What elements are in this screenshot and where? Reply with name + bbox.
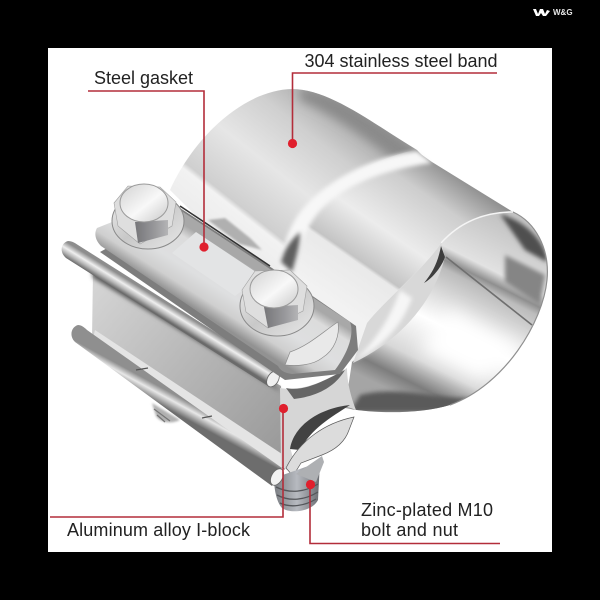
rear bolt thread lines xyxy=(154,409,170,422)
end face upper notch xyxy=(286,370,345,399)
hex head xyxy=(242,270,307,328)
label line one: Zinc-plated M10 xyxy=(361,500,493,520)
callout: zinc-plated bolt xyxy=(306,480,500,544)
steel gasket plate xyxy=(95,206,358,380)
marker dot xyxy=(279,404,288,413)
white product panel xyxy=(48,48,552,552)
end face lower notch xyxy=(290,405,350,450)
marker dot xyxy=(288,139,297,148)
thread grooves xyxy=(276,484,318,506)
interior reflections xyxy=(350,214,547,412)
plate shadow edge xyxy=(100,208,358,380)
callout: steel gasket xyxy=(88,68,209,252)
I-block end face xyxy=(280,368,356,470)
lower rod end xyxy=(268,466,286,488)
domed cap xyxy=(120,184,168,222)
shadow under upper rod xyxy=(90,262,281,392)
hex front face xyxy=(135,220,168,243)
ridge shadow xyxy=(281,232,300,272)
leader line xyxy=(292,73,497,143)
rod notches xyxy=(136,368,212,418)
lower threaded stub behind block xyxy=(152,403,180,422)
rim highlight xyxy=(441,212,513,243)
top plate edge dark line xyxy=(180,206,270,266)
nut xyxy=(296,456,324,482)
upper rod end xyxy=(264,369,282,389)
logo text: W&G xyxy=(553,8,573,17)
plate body xyxy=(95,210,351,374)
upper rod xyxy=(62,241,277,386)
label line two: bolt and nut xyxy=(361,520,458,540)
bolt head 2 xyxy=(240,270,314,336)
rim edge xyxy=(441,212,547,405)
band shading xyxy=(296,90,418,157)
ridge highlight xyxy=(280,151,432,272)
gasket textured surface xyxy=(172,232,262,296)
label: 304 stainless steel band xyxy=(304,51,498,71)
callout: aluminum I-block xyxy=(50,404,288,540)
infographic: exhaust band clamp with labelled parts xyxy=(48,9,572,552)
bolt shank thread xyxy=(274,462,320,511)
marker dot xyxy=(306,480,315,489)
marker dot xyxy=(199,242,209,252)
band collar ridge xyxy=(280,151,432,272)
aluminum alloy I-block xyxy=(90,262,356,476)
lower rod xyxy=(71,325,282,486)
inner lip crescent xyxy=(353,243,445,363)
rear bolt thread xyxy=(152,403,180,422)
small rear tab behind plate xyxy=(208,218,262,250)
flange xyxy=(112,193,184,249)
hex head xyxy=(114,186,176,244)
rods xyxy=(62,241,286,488)
domed cap xyxy=(250,270,298,308)
leader line xyxy=(88,91,204,247)
brand logo xyxy=(533,8,573,17)
front band section xyxy=(282,150,513,363)
lip dark streak xyxy=(424,246,445,283)
zinc-plated bolt and nut xyxy=(274,456,324,511)
label: Aluminum alloy I-block xyxy=(67,520,251,540)
rear band section xyxy=(170,89,432,310)
leader line xyxy=(310,484,500,544)
stainless steel band xyxy=(170,88,547,412)
folded plate end xyxy=(285,322,338,365)
lip highlight xyxy=(355,290,412,360)
foot flange xyxy=(286,417,354,476)
bolt head 1 xyxy=(112,184,184,249)
I-block side face xyxy=(92,272,285,470)
hex front face xyxy=(264,305,298,328)
leader line xyxy=(50,409,283,517)
callout: stainless steel band xyxy=(288,51,498,148)
label: Steel gasket xyxy=(94,68,193,88)
flange xyxy=(240,276,314,336)
logo mark xyxy=(533,9,550,16)
lower ledge xyxy=(92,330,285,470)
band interior xyxy=(345,212,547,412)
